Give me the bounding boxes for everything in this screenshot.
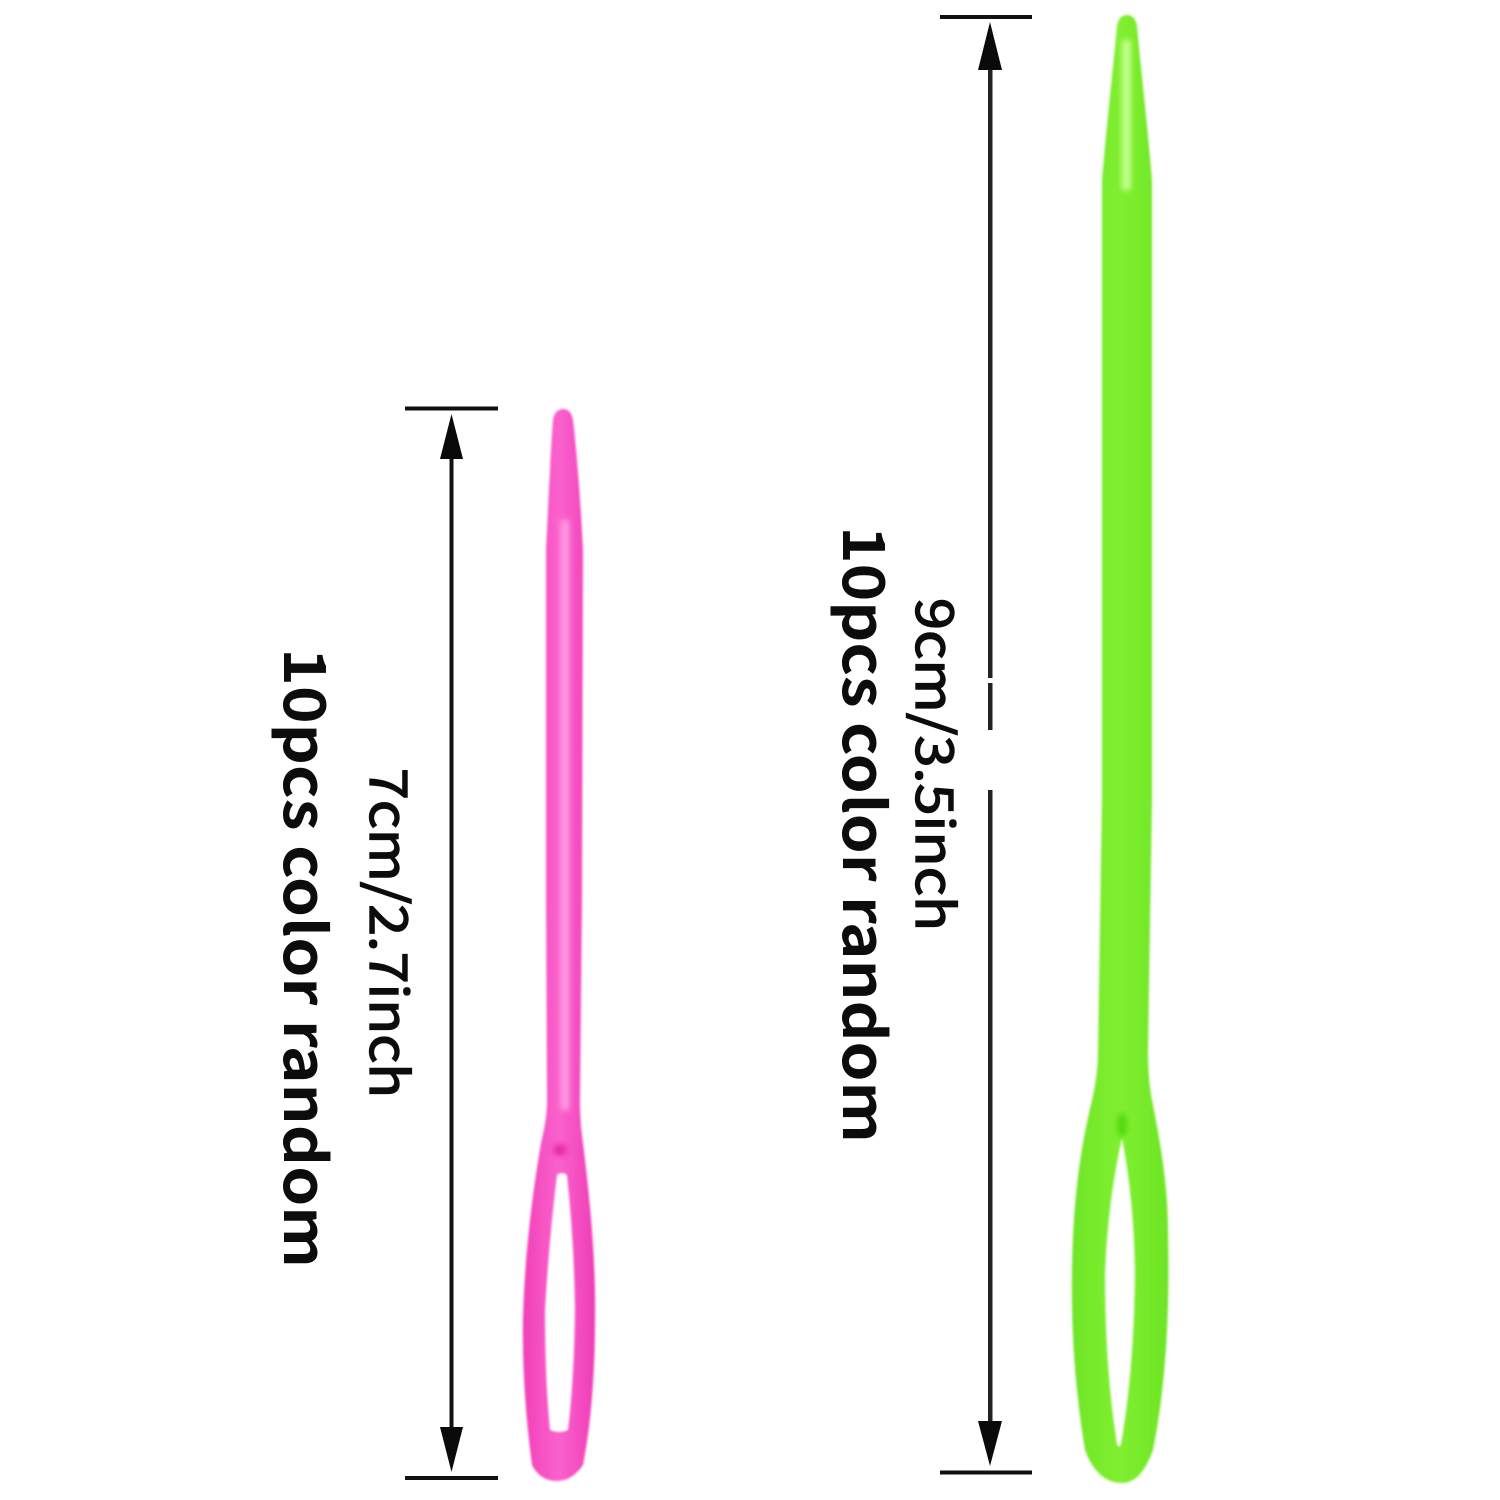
label: pink size: 7cm/2.7inch xyxy=(355,768,430,1098)
label: green size: 9cm/3.5inch xyxy=(901,598,976,931)
green needle xyxy=(1072,15,1168,1483)
shading: green needle eye junction xyxy=(1117,1113,1127,1137)
label: green quantity: 10pcs color random xyxy=(826,526,910,1143)
highlight: pink needle shaft xyxy=(561,520,569,1110)
pink needle xyxy=(523,409,595,1481)
green needle dimension: 9cm xyxy=(940,15,1032,1474)
label: pink quantity: 10pcs color random xyxy=(267,648,351,1268)
shading: pink needle eye junction xyxy=(553,1144,567,1156)
pink needle dimension: 7cm xyxy=(405,406,498,1480)
highlight: green needle tip xyxy=(1122,40,1131,190)
